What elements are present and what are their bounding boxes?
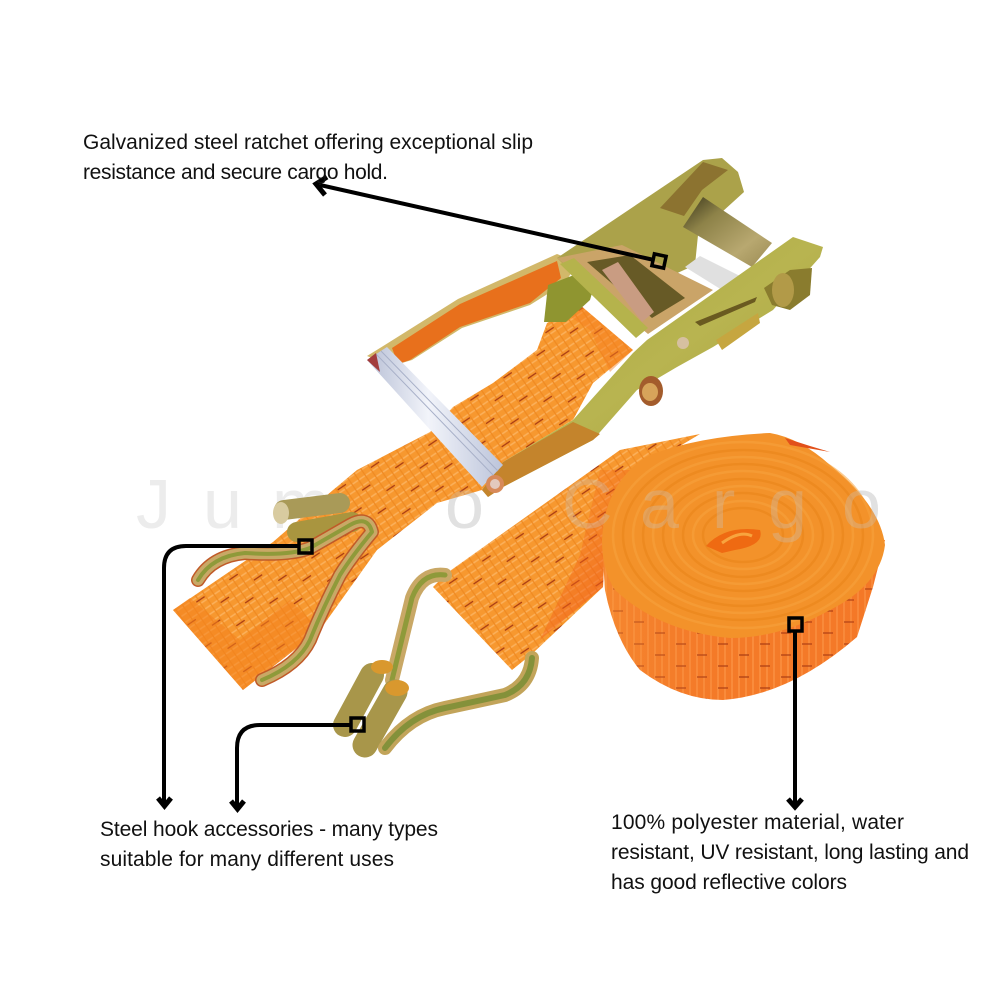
watermark: Jumbo Cargo: a [640,465,679,543]
coil: outer edge shadow [785,438,830,452]
handle: silver bar [367,347,504,493]
watermark: Jumbo Cargo: b [366,465,405,543]
watermark: Jumbo Cargo: m [272,465,330,543]
strap: long strap joining coil to lower hook [433,434,700,670]
ratchet: lower olive arm [482,237,823,497]
text: polyester description: has good reflective colors [611,871,847,894]
watermark: overlay on strap and coil: r [712,465,735,543]
icon: ratchet mechanism [367,158,823,497]
watermark: Jumbo Cargo: o [842,465,881,543]
watermark: Jumbo Cargo: o [445,465,484,543]
strap: coil [602,433,885,700]
text: polyester description [611,811,969,894]
watermark: overlay on strap and coil: a [640,465,679,543]
watermark: overlay on strap and coil: C [562,465,613,543]
text: polyester description: resistant, UV resistant, long lasting and [611,841,969,864]
watermark: Jumbo Cargo [136,465,881,543]
strap: short strap from ratchet to left hook [173,305,633,690]
watermark: Jumbo Cargo: g [768,465,807,543]
watermark: Jumbo Cargo: r [712,465,735,543]
ratchet: barrel [683,197,772,267]
arrow: polyester material callout [788,618,802,807]
coil: side band [602,540,885,700]
watermark: overlay on strap and coil [445,465,881,543]
ratchet: lower pivot [639,376,663,406]
watermark: Jumbo Cargo: u [203,465,242,543]
watermark: Jumbo Cargo: J [136,465,171,543]
ratchet: window [685,256,740,290]
watermark: overlay on strap and coil: g [768,465,807,543]
text: polyester description: 100% polyester material, water [611,811,904,834]
text: ratchet description: resistance and secure cargo hold. [83,161,388,184]
text: ratchet description [83,131,533,184]
text: hook description [100,818,438,871]
icon: right hook [345,575,532,748]
handle: upper orange arm [367,254,578,366]
watermark: overlay on strap and coil: o [445,465,484,543]
coil: inner loop [706,529,761,553]
arrow: left hook callout [158,540,312,806]
watermark: Jumbo Cargo: C [562,465,613,543]
text: hook description: suitable for many different uses [100,848,394,871]
ratchet: centre pink plate [557,245,713,334]
arrow: ratchet callout [316,177,666,268]
ratchet: slot and latch [695,297,757,326]
ratchet: bolt [764,268,812,310]
ratchet: upper plate [557,158,744,290]
icon: left hook [198,502,372,680]
text: hook description: Steel hook accessories - many types [100,818,438,841]
coil: top face [602,433,885,638]
ratchet: rivet [677,337,689,349]
text: ratchet description: Galvanized steel ratchet offering exceptional slip [83,131,533,154]
watermark: overlay on strap and coil: o [842,465,881,543]
arrow: right hook callout [231,718,364,809]
